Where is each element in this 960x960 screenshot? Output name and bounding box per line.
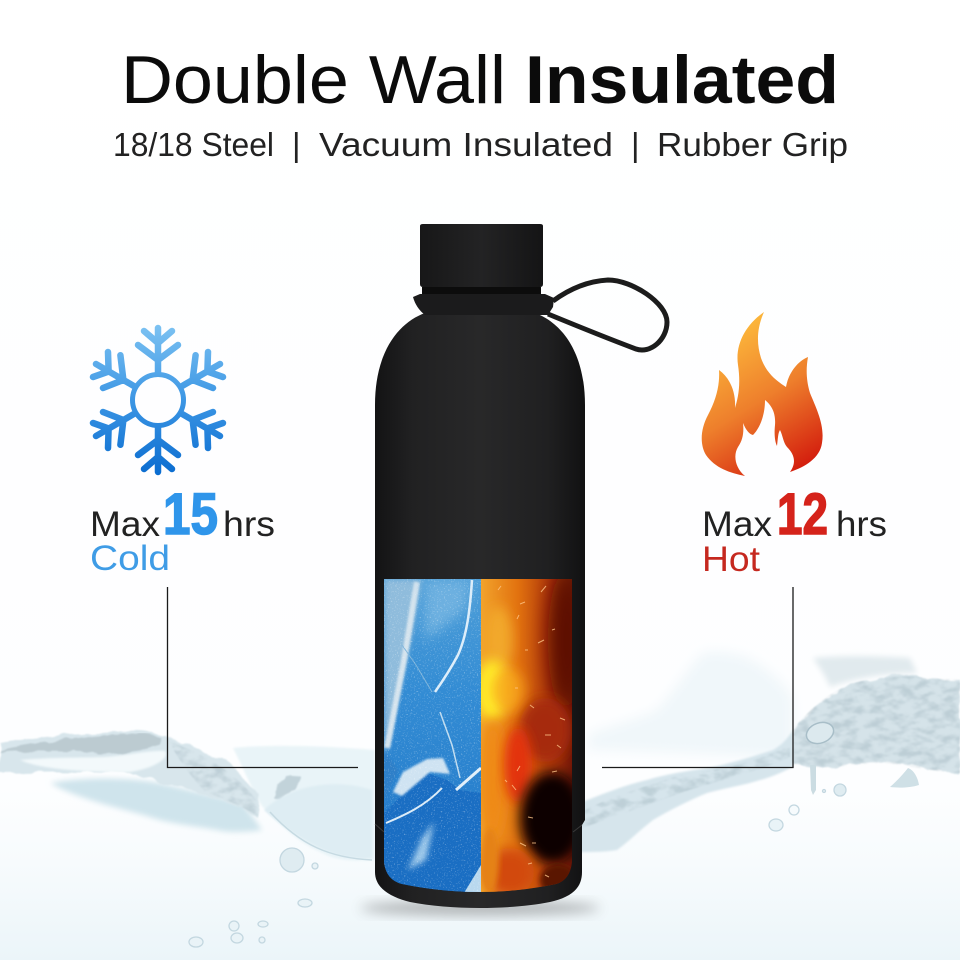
base seam bbox=[375, 824, 582, 832]
bottle loop strap bbox=[548, 280, 667, 350]
hot label: Max bbox=[702, 505, 773, 544]
bottle body bbox=[375, 313, 585, 908]
cold label: Cold bbox=[90, 539, 170, 578]
bottle shadow bbox=[360, 900, 600, 916]
hot label: hrs bbox=[836, 505, 887, 544]
cold label: Max bbox=[90, 505, 161, 544]
cold label: 15 bbox=[163, 482, 218, 547]
hot label: Hot bbox=[702, 540, 760, 579]
subtitle: 18/18 Steel bbox=[113, 126, 274, 163]
callout line: cold bbox=[168, 587, 358, 768]
hot label bbox=[702, 482, 887, 579]
title: Insulated bbox=[525, 42, 839, 118]
icon: flame bbox=[702, 312, 823, 476]
bottle cap bbox=[420, 224, 543, 287]
water droplets bbox=[189, 784, 846, 947]
title bbox=[121, 42, 839, 118]
callout line: hot bbox=[602, 587, 793, 768]
ice half bbox=[384, 579, 481, 899]
title: Double Wall bbox=[121, 42, 506, 118]
bottle bbox=[375, 224, 667, 908]
icon: snowflake bbox=[93, 328, 223, 472]
subtitle: | bbox=[292, 126, 301, 163]
ice and fire panel bbox=[384, 579, 572, 892]
sparks bbox=[498, 586, 565, 877]
hot label: 12 bbox=[777, 482, 828, 547]
subtitle: Rubber Grip bbox=[657, 126, 848, 163]
collar bbox=[413, 294, 554, 315]
fire half bbox=[481, 579, 572, 892]
subtitle: Vacuum Insulated bbox=[319, 126, 613, 163]
water: left wave bbox=[0, 731, 375, 861]
cold label: hrs bbox=[223, 505, 275, 544]
neck ring bbox=[422, 287, 541, 295]
water splash bbox=[0, 652, 960, 947]
subtitle: | bbox=[631, 126, 640, 163]
subtitle bbox=[113, 126, 848, 163]
cold label bbox=[90, 482, 275, 578]
water: right wave bbox=[580, 652, 960, 852]
